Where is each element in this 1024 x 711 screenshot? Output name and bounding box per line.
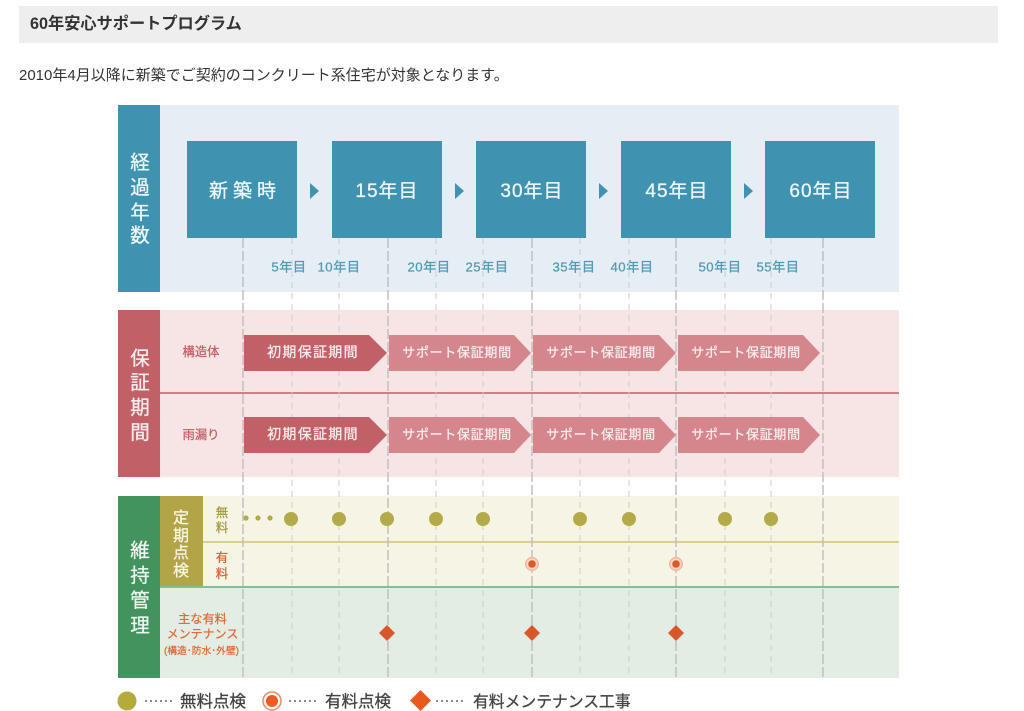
year labels: 35年目	[552, 260, 596, 274]
heading: elapsed years: 経	[130, 152, 150, 174]
legend: free inspection: 無料点検	[180, 692, 246, 711]
paid inspection markers	[525, 557, 683, 571]
milestone labels: 60年目	[789, 180, 853, 202]
milestone boxes	[187, 141, 875, 238]
heading: maintenance: 管	[130, 590, 150, 612]
heading: regular inspection: 点	[173, 544, 189, 562]
heading: warranty period: 証	[130, 372, 150, 394]
row labels: 料	[216, 567, 229, 581]
heading: warranty period: 間	[130, 422, 150, 444]
milestone labels: 45年目	[645, 180, 709, 202]
legend: free inspection	[118, 692, 246, 711]
title: 60年安心サポートプログラム	[30, 15, 242, 33]
heading: warranty period: 期	[130, 397, 150, 419]
year labels: 40年目	[610, 260, 654, 274]
year labels	[271, 260, 800, 274]
arrow row: rain leak: サポート保証期間	[402, 427, 512, 442]
legend	[118, 690, 631, 711]
paid maintenance markers	[379, 625, 684, 641]
legend: paid inspection	[263, 692, 392, 711]
maintenance label: 主な有料	[178, 612, 227, 626]
arrows between milestones	[310, 183, 753, 199]
row labels: 構造体	[183, 345, 219, 359]
arrow row: structure	[244, 335, 820, 371]
heading: elapsed years: 過	[130, 177, 150, 199]
year labels: 20年目	[407, 260, 451, 274]
row labels: 料	[216, 521, 229, 535]
arrow row: structure: 初期保証期間	[267, 344, 359, 360]
heading: elapsed years: 数	[130, 225, 150, 247]
year labels: 10年目	[317, 260, 361, 274]
year labels: 50年目	[698, 260, 742, 274]
heading: elapsed years	[130, 152, 150, 247]
row labels: 無	[216, 505, 228, 520]
free inspection markers	[243, 512, 778, 526]
milestone labels: 新築時	[209, 180, 281, 202]
arrow row: structure: サポート保証期間	[691, 345, 801, 360]
heading: maintenance: 維	[130, 540, 150, 562]
milestone labels: 30年目	[500, 180, 564, 202]
legend: paid inspection: 有料点検	[325, 692, 392, 711]
row labels	[216, 505, 229, 581]
heading: regular inspection: 検	[173, 562, 189, 580]
timeline dashed lines	[243, 238, 823, 678]
arrow row: structure: サポート保証期間	[402, 345, 512, 360]
heading: warranty period: 保	[130, 348, 150, 370]
maintenance label: メンテナンス	[167, 627, 238, 641]
arrow row: rain leak: サポート保証期間	[691, 427, 801, 442]
year labels: 55年目	[756, 260, 800, 274]
year labels: 5年目	[271, 260, 307, 274]
intro text: 2010年4月以降に新築でご契約のコンクリート系住宅が対象となります。	[19, 67, 509, 84]
maintenance label: (構造･防水･外壁)	[164, 644, 239, 657]
heading: maintenance: 理	[130, 615, 150, 637]
row labels: 雨漏り	[183, 427, 219, 442]
milestone labels: 15年目	[355, 180, 419, 202]
heading: maintenance	[130, 540, 150, 637]
panel: warranty period	[118, 310, 899, 477]
panel: elapsed years	[118, 105, 899, 292]
heading: regular inspection	[173, 509, 189, 580]
milestone labels	[209, 180, 853, 202]
row labels	[183, 345, 219, 442]
arrow row: rain leak: サポート保証期間	[546, 427, 656, 442]
legend: paid maintenance work	[410, 690, 631, 711]
legend: paid maintenance work: 有料メンテナンス工事	[473, 693, 631, 711]
heading: elapsed years: 年	[130, 202, 150, 224]
arrow row: structure: サポート保証期間	[546, 345, 656, 360]
arrow row: rain leak: 初期保証期間	[267, 426, 359, 442]
row labels: 有	[216, 551, 228, 565]
arrow row: rain leak	[244, 417, 820, 453]
title	[19, 6, 998, 43]
warranty arrows	[244, 335, 820, 453]
heading: regular inspection: 定	[173, 509, 189, 527]
heading: maintenance: 持	[130, 565, 150, 587]
panel: maintenance	[118, 496, 899, 678]
heading: warranty period	[130, 348, 150, 444]
maintenance label	[164, 612, 239, 657]
year labels: 25年目	[465, 260, 509, 274]
heading: regular inspection: 期	[173, 527, 189, 545]
